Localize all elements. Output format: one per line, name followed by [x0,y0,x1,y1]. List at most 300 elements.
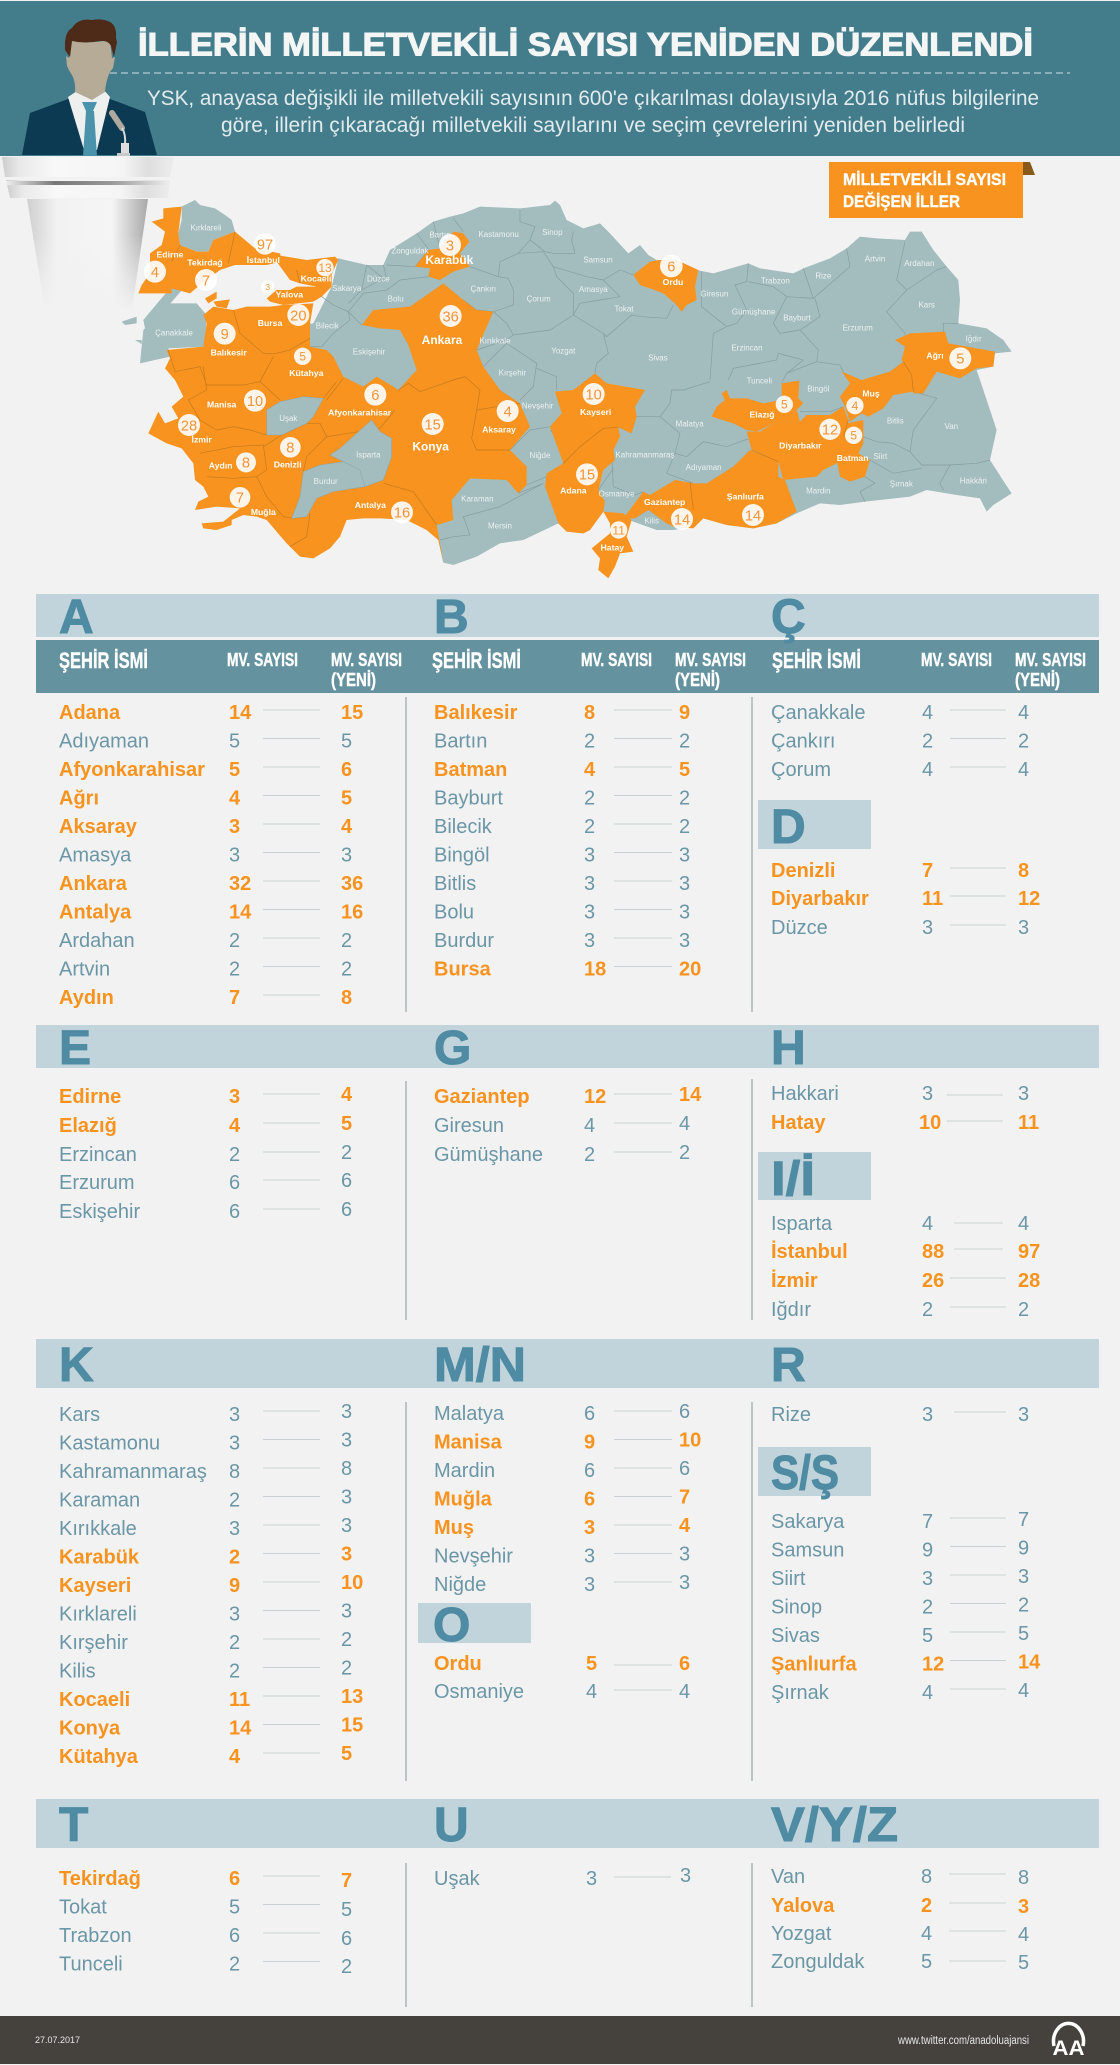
rows: G: 4 [584,1115,595,1137]
rows: T: 7 [341,1870,352,1892]
seat count circles: 8 [242,456,250,472]
rows: Ç: 4 [922,759,933,781]
rows: O: 5 [586,1653,597,1675]
rows: I: 97 [1018,1241,1040,1263]
rows: M/N: 4 [679,1515,691,1537]
seat count circles: 10 [586,387,602,403]
header banner [0,1,1120,156]
seat count circles: 36 [443,309,459,325]
seat count circles: 15 [579,468,595,484]
changed province labels: Kocaeli [301,274,331,284]
province borders on grey [310,210,990,540]
seat count circles: 7 [236,491,244,507]
rows: A: 15 [341,702,363,724]
rows: S: 5 [1018,1623,1029,1645]
rows: E: 5 [341,1113,352,1135]
rows: Ç: Çankırı [771,730,835,752]
rows: S: 5 [922,1625,933,1647]
grey province labels: Çankırı [470,285,496,294]
rows: B: 20 [679,958,701,980]
seat count circles: 7 [202,273,210,289]
seat count circles: 5 [299,350,306,364]
seat count circles: 9 [221,327,229,343]
grey province labels: Zonguldak [391,247,429,256]
seat count circles: 14 [745,508,761,524]
rows: E: 3 [229,1086,240,1108]
grey province labels: Bayburt [783,314,812,323]
rows: A: 36 [341,873,363,895]
rows: A: 14 [229,902,252,924]
rows: B: 3 [679,844,690,866]
rows: V/Y/Z: 2 [921,1895,932,1917]
rows: B: 3 [679,873,690,895]
grey province labels: Nevşehir [522,401,554,410]
rows: K: 3 [229,1604,240,1626]
changed province labels: Elazığ [749,409,775,419]
rows: V/Y/Z: Yozgat [771,1923,832,1945]
changed province labels: Denizli [274,459,302,469]
rows: V/Y/Z: 4 [921,1923,932,1945]
rows: K: 5 [341,1743,352,1765]
seat count circles: 6 [667,259,675,275]
grey province labels: Şırnak [890,479,913,488]
panel: T U V table [36,1799,1099,2007]
rows: B: 2 [679,816,690,838]
rows: K: 3 [341,1486,352,1508]
rows: R [771,1404,1029,1426]
changed province labels: Edirne [157,249,184,259]
rows: E: 6 [341,1199,352,1221]
seat count circles: 20 [290,308,306,324]
grey province labels: Yozgat [551,347,576,356]
rows: M/N: Muğla [434,1488,493,1510]
grey province labels: Burdur [314,477,338,486]
rows: U: 3 [680,1865,691,1887]
rows: A: 2 [341,958,352,980]
grey province labels: Adıyaman [686,463,722,472]
rows: O [434,1653,690,1703]
rows: G: Gümüşhane [434,1144,543,1166]
changed province labels: Yalova [276,290,303,300]
rows: I: İstanbul [771,1240,848,1263]
grey province labels: Bilecik [316,321,339,330]
grey province labels [155,224,987,531]
rows: K: Kastamonu [59,1432,160,1454]
rows: M/N: Mardin [434,1460,495,1482]
changed province labels: Antalya [355,500,386,510]
rows: A: 3 [229,816,240,838]
rows: S: 9 [922,1540,933,1562]
rows: A: 32 [229,873,251,895]
grey province labels: Tokat [614,304,634,313]
rows: T: 6 [341,1928,352,1950]
section letters T U V/Y/Z: U [434,1799,469,1852]
rows: B: Bartın [434,730,487,752]
rows: I: Iğdır [771,1299,811,1321]
seat count circles: 13 [318,261,332,275]
intro text: YSK, anayasa değişikli ile milletvekili sayısının 600'e çıkarılması dolayısıyla 2016 nüfus bilgilerine [147,87,1039,110]
grey province labels: Trabzon [761,276,790,285]
rows: O: 4 [679,1681,690,1703]
rows: D: 3 [1018,917,1029,939]
rows: Ç: 2 [1018,730,1029,752]
rows: T: 6 [229,1925,240,1947]
sub-heading O: O [433,1599,470,1652]
section letters A B Ç: B [434,591,469,644]
rows: V/Y/Z: 5 [921,1951,932,1973]
rows: B: 18 [584,958,606,980]
rows: V/Y/Z: Yalova [771,1895,835,1917]
rows: E: 4 [341,1084,353,1106]
rows: B: 4 [584,759,596,781]
rows: K: 3 [229,1404,240,1426]
panel: A B Ç D table [36,591,1099,1012]
sub-heading D: D [771,801,806,854]
rows: I: 4 [1018,1213,1029,1235]
panel: K M/N O R S table [36,1339,1099,1781]
rows: H: 11 [1018,1112,1039,1134]
grey province labels: Bartın [429,230,451,239]
sub-heading S/Ş: S/Ş [771,1447,839,1500]
changed province labels: İzmir [192,434,212,444]
rows: V/Y/Z: Van [771,1866,805,1888]
grey province labels: Kahramanmaraş [615,450,675,459]
changed province labels: Muş [862,388,880,398]
rows: S: 2 [1018,1594,1029,1616]
rows: K: Kayseri [59,1575,131,1597]
rows: O: 6 [679,1653,690,1675]
rows: S: Şırnak [771,1682,830,1704]
rows: M/N: 6 [679,1458,690,1480]
rows: B: 2 [679,788,690,810]
rows: M/N: 9 [584,1432,595,1454]
rows: B: Bolu [434,902,474,924]
rows: A: 7 [229,987,240,1009]
rows: M/N: 3 [584,1574,595,1596]
rows: V/Y/Z: 4 [1018,1924,1029,1946]
rows: A: Artvin [59,958,110,980]
intro text: göre, illerin çıkaracağı milletvekili sayılarını ve seçim çevrelerini yeniden belirledi [221,114,965,137]
rows: K: Kırıkkale [59,1518,137,1540]
rows: Ç: 4 [1018,702,1029,724]
rows: M/N: 10 [679,1430,701,1452]
rows: G: 12 [584,1086,606,1108]
rows: T: Tokat [59,1896,107,1918]
rows: S: 12 [922,1654,944,1676]
rows: S: Siirt [771,1568,806,1590]
rows: H: Hakkari [771,1083,839,1105]
grey province labels: Niğde [530,451,551,460]
rows: H: 3 [1018,1083,1029,1105]
grey province labels: Bingöl [807,385,830,394]
rows: A: 4 [229,788,241,810]
grey province labels: Bolu [388,295,404,304]
table header [59,648,1086,690]
changed province labels: Kütahya [289,368,324,378]
rows: S: 2 [922,1596,933,1618]
grey province labels: Kilis [644,516,659,525]
rows: K: 9 [229,1575,240,1597]
rows: E: 4 [229,1115,241,1137]
rows: M/N [434,1401,701,1596]
rows: S: Sakarya [771,1511,845,1533]
changed province labels: Manisa [207,399,237,409]
grey province labels: Bitlis [887,416,904,425]
rows: S: 9 [1018,1538,1029,1560]
rows: B: 3 [584,930,595,952]
changed province labels: Hatay [601,543,624,553]
grey province labels: Malatya [676,419,704,428]
rows: Ç: 4 [922,702,933,724]
rows: K: 4 [229,1746,241,1768]
grey province labels: Gümüşhane [732,308,776,317]
grey province labels: Karaman [461,495,494,504]
rows: K: 3 [341,1401,352,1423]
rows: Ç [771,702,1029,781]
changed province labels: Ağrı [926,350,944,360]
grey province labels: Çanakkale [155,329,193,338]
rows: T: Trabzon [59,1925,132,1947]
rows: O: Ordu [434,1653,482,1675]
rows: G: Giresun [434,1115,504,1137]
rows: K: Karaman [59,1490,140,1512]
grey province labels: Eskişehir [353,348,386,357]
rows: A: 14 [229,702,252,724]
rows: B: 9 [679,702,690,724]
orange provinces [138,207,995,578]
seat count circles [144,233,971,539]
seat count circles: 12 [822,423,838,439]
rows: B: Bayburt [434,788,503,810]
rows: K: Kahramanmaraş [59,1461,207,1483]
date: 27.07.2017 [35,2035,80,2045]
province borders on orange [168,232,913,547]
seat count circles: 15 [425,417,441,433]
rows: B: Bilecik [434,816,493,838]
section letters K M/N R: K [59,1339,94,1392]
changed province labels: Aksaray [482,424,516,434]
rows: I: İzmir [771,1269,818,1292]
rows: T: 5 [341,1899,352,1921]
grey province labels: Mardin [806,486,831,495]
changed province labels [157,249,944,553]
rows: T: Tekirdağ [59,1868,141,1890]
section letters A B Ç: A [59,591,94,644]
grey province labels: Amasya [579,285,608,294]
sub-heading O [418,1599,531,1652]
rows: I: 4 [922,1213,933,1235]
rows: A: 3 [341,844,352,866]
rows: V/Y/Z: Zonguldak [771,1951,865,1973]
rows: E: 6 [341,1170,352,1192]
rows: G: 2 [584,1144,595,1166]
rows: I: Isparta [771,1213,833,1235]
sub-heading I/İ [758,1152,871,1206]
rows: S [771,1509,1041,1704]
rows: M/N: 6 [584,1488,595,1510]
rows: T [59,1868,352,1978]
rows: B: 3 [679,902,690,924]
table header: MV. SAYISI [581,650,652,670]
rows: A: Aksaray [59,816,138,838]
rows: I: 2 [922,1299,933,1321]
map of Turkey [122,200,1012,578]
rows: G: Gaziantep [434,1086,530,1108]
rows: A: Adana [59,702,121,724]
rows: B: Bursa [434,958,492,980]
table header: MV. SAYISI [331,650,402,670]
table header: MV. SAYISI [227,650,298,670]
rows: G [434,1084,702,1166]
rows: K: 3 [341,1515,352,1537]
rows: I: 88 [922,1241,944,1263]
rows: A: Ağrı [59,788,99,810]
changed province labels: Gaziantep [644,497,685,507]
rows: S: 4 [1018,1680,1029,1702]
rows: D: Denizli [771,860,835,882]
rows: M/N: 3 [679,1572,690,1594]
section letters K M/N R: M/N [434,1339,526,1392]
rows: M/N: Muş [434,1517,474,1539]
grey provinces enclosed by orange [267,397,392,518]
rows: V/Y/Z: 5 [1018,1952,1029,1974]
rows: K: 3 [341,1544,352,1566]
changed province labels: Ankara [422,333,463,347]
rows: B: 3 [584,844,595,866]
grey province labels: Çorum [527,295,551,304]
table header: (YENİ) [675,670,720,690]
section letters E G H: E [59,1022,91,1075]
rows: A: 2 [341,930,352,952]
rows: O: 4 [586,1681,597,1703]
rows: K: 2 [229,1490,240,1512]
rows: B: 3 [584,873,595,895]
grey province labels: Van [945,422,958,431]
rows: A: Ankara [59,873,128,895]
rows: Ç: Çanakkale [771,702,866,724]
rows: D: 8 [1018,860,1029,882]
grey province labels: Artvin [865,255,885,264]
rows: H: 10 [919,1112,941,1134]
rows: B: 3 [584,902,595,924]
changed province labels: Bursa [258,318,282,328]
rows: A: Ardahan [59,930,135,952]
rows: S: Sivas [771,1625,820,1647]
rows: M/N: Manisa [434,1432,503,1454]
grey province labels: Mersin [488,522,512,531]
rows: B: Batman [434,759,507,781]
changed province labels: İstanbul [247,255,280,265]
rows: I: 26 [922,1270,944,1292]
section letters K M/N R: R [771,1339,806,1392]
section letters A B Ç [59,591,806,644]
grey province labels: Kırıkkale [479,336,511,345]
rows: A: 5 [341,730,352,752]
rows: B [434,702,701,980]
rows: O: Osmaniye [434,1681,524,1703]
section letters A B Ç: Ç [771,591,806,644]
rows: G: 2 [679,1142,690,1164]
seat count circles: 28 [181,418,197,434]
rows: R: 3 [922,1404,933,1426]
illustration: speaker at podium [2,19,174,312]
rows: S: Samsun [771,1540,844,1562]
seat count circles: 6 [371,388,379,404]
rows: A: Afyonkarahisar [59,759,205,781]
table header: MV. SAYISI [675,650,746,670]
rows: B: 8 [584,702,595,724]
rows: K: 13 [341,1686,363,1708]
rows: E: Eskişehir [59,1201,140,1223]
rows: K: 11 [229,1689,250,1711]
rows: A: 2 [229,930,240,952]
rows: K: 3 [341,1430,352,1452]
table header: ŞEHİR İSMİ [772,648,861,673]
rows: D: 3 [922,917,933,939]
changed province labels: Balıkesir [211,348,247,358]
changed province labels: Konya [412,440,449,454]
rows: K: 8 [341,1458,352,1480]
rows: A: Aydın [59,987,114,1009]
rows: K: 8 [229,1461,240,1483]
rows: B: Burdur [434,930,494,952]
rows: I [771,1213,1040,1321]
rows: M/N: 7 [679,1486,690,1508]
rows: B: 2 [584,730,595,752]
rows: S: 7 [922,1511,933,1533]
rows: K: Karabük [59,1546,140,1568]
rows: U [434,1865,691,1890]
seat count circles: 16 [394,506,410,522]
rows: A: 16 [341,902,363,924]
changed province labels: Tekirdağ [187,258,223,268]
seat count circles: 10 [247,394,263,410]
grey province labels: Sinop [542,228,563,237]
rows: H: Hatay [771,1112,826,1134]
rows: S: 14 [1018,1652,1041,1674]
grey province labels: Kırşehir [499,369,526,378]
rows: B: 2 [584,788,595,810]
sub-heading D [758,800,871,854]
twitter link text: www.twitter.com/anadoluajansi [897,2035,1029,2047]
rows: A [59,702,363,1009]
changed province labels: Diyarbakır [779,441,822,451]
rows: E: 2 [341,1142,352,1164]
changed province labels: Ordu [663,277,683,287]
grey province labels: Sivas [648,353,668,362]
section letters E G H: G [434,1022,471,1075]
grey province labels: Düzce [367,274,390,283]
grey province labels: Rize [815,272,832,281]
rows: E: 2 [229,1144,240,1166]
grey province labels: Osmaniye [599,490,635,499]
seat count circles: 5 [781,398,788,412]
icon: AA logo [1052,2023,1084,2060]
grey province labels: Giresun [700,290,728,299]
rows: A: Adıyaman [59,730,149,752]
footer [0,2016,1120,2064]
rows: K: 14 [229,1718,252,1740]
rows: E [59,1084,353,1223]
rows: B: Bitlis [434,873,476,895]
changed province labels: Karabük [425,253,474,267]
rows: R: 3 [1018,1404,1029,1426]
rows: K: 10 [341,1572,363,1594]
rows: K: 2 [229,1546,240,1568]
rows: A: 2 [229,958,240,980]
rows: G: 4 [679,1113,690,1135]
rows: K: 2 [341,1629,352,1651]
